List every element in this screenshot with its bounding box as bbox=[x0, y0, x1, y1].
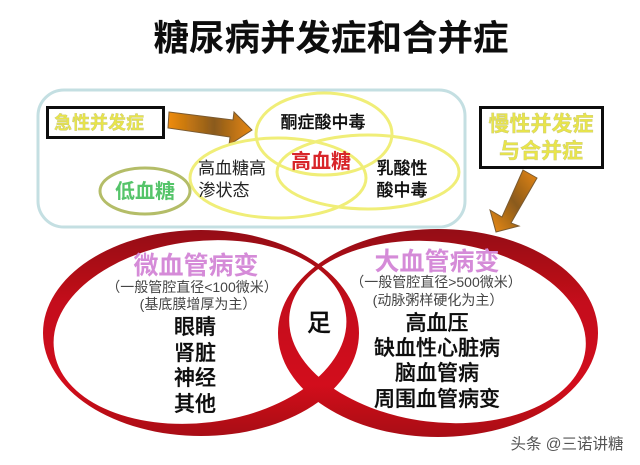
ellipse: hypoglycemia bbox=[100, 168, 190, 214]
arrow: to acute ellipses bbox=[168, 112, 252, 145]
label box: chronic complications: 与合并症 bbox=[499, 140, 583, 163]
text: ketoacidosis: 酮症酸中毒 bbox=[280, 113, 366, 132]
text: hyperosmolar state bbox=[198, 159, 266, 200]
text: microvascular disease bbox=[106, 252, 278, 416]
text: hyperosmolar state: 渗状态 bbox=[198, 181, 250, 200]
label box: acute complications bbox=[48, 108, 164, 138]
label box: chronic complications: 慢性并发症 bbox=[488, 113, 594, 136]
ellipse: hyperosmolar bbox=[190, 138, 366, 218]
text: microvascular disease: 肾脏 bbox=[174, 342, 216, 365]
ellipse: lactic acidosis bbox=[277, 135, 459, 209]
text: lactic acidosis: 酸中毒 bbox=[376, 181, 428, 200]
text: microvascular disease: 神经 bbox=[174, 367, 216, 390]
text: microvascular disease: 眼睛 bbox=[174, 316, 216, 339]
panel: acute complications bbox=[38, 90, 465, 227]
text: macrovascular disease: 周围血管病变 bbox=[374, 388, 500, 411]
text: macrovascular disease: （一般管腔直径>500微米） bbox=[350, 274, 522, 290]
label box: acute complications: 急性并发症 bbox=[54, 112, 144, 133]
text: lactic acidosis bbox=[376, 159, 428, 200]
text: macrovascular disease: 脑血管病 bbox=[395, 362, 479, 385]
text: microvascular disease: （一般管腔直径<100微米） bbox=[106, 279, 278, 295]
text: microvascular disease: 其他 bbox=[174, 393, 216, 416]
arrow: to macrovascular ring bbox=[490, 170, 537, 232]
title: 糖尿病并发症和合并症 bbox=[153, 18, 509, 58]
label box: chronic complications bbox=[480, 108, 602, 168]
ellipse: hypoglycemia: 低血糖 bbox=[115, 179, 175, 203]
ring: macrovascular bbox=[278, 229, 598, 437]
text: macrovascular disease: (动脉粥样硬化为主） bbox=[373, 292, 503, 308]
text: macrovascular disease: 缺血性心脏病 bbox=[374, 337, 500, 360]
text: foot: 足 bbox=[307, 310, 331, 337]
text: macrovascular disease: 高血压 bbox=[406, 312, 468, 335]
text: microvascular disease: 微血管病变 bbox=[133, 252, 259, 280]
text: macrovascular disease bbox=[350, 248, 522, 411]
text: lactic acidosis: 乳酸性 bbox=[376, 159, 428, 178]
ellipse: ketoacidosis bbox=[256, 93, 392, 175]
watermark: 头条 @三诺讲糖 bbox=[510, 435, 624, 453]
text: macrovascular disease: 大血管病变 bbox=[374, 248, 500, 276]
text: microvascular disease: (基底膜增厚为主） bbox=[140, 296, 256, 312]
text: hyperglycemia: 高血糖 bbox=[291, 149, 351, 173]
ring: microvascular bbox=[43, 230, 359, 436]
text: hyperosmolar state: 高血糖高 bbox=[198, 159, 266, 178]
